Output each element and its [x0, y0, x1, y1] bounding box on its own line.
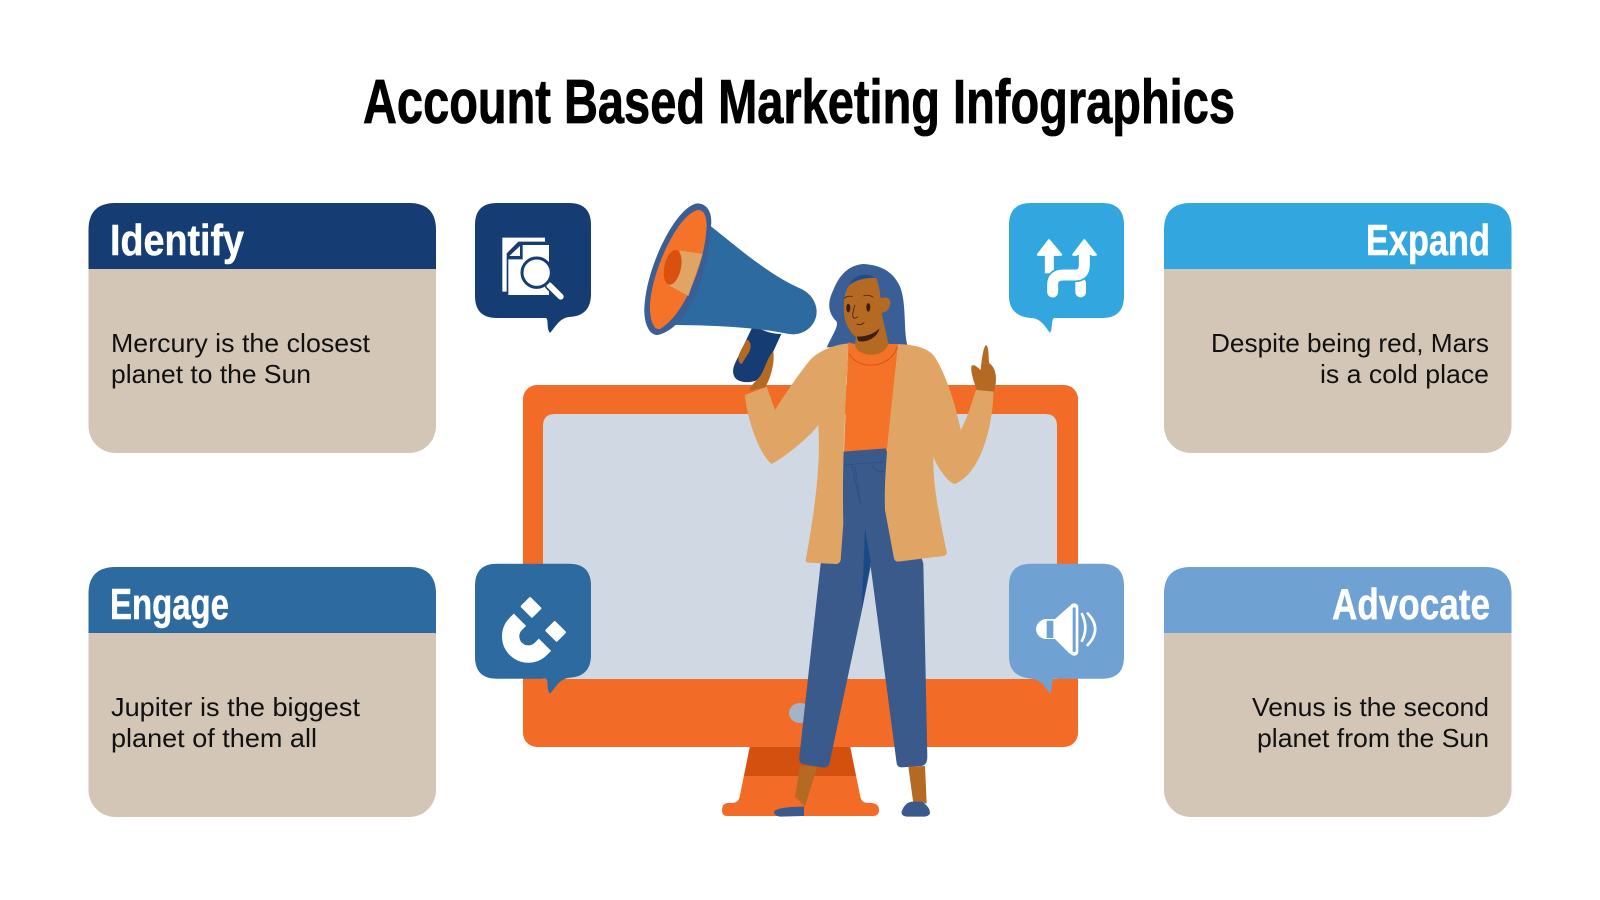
facial features [844, 295, 879, 341]
panel: identify [88, 203, 436, 453]
neck and face [844, 278, 897, 360]
description [1211, 328, 1489, 389]
icon bubble: speaker [1009, 564, 1124, 694]
card body [88, 203, 436, 453]
hand holding megaphone [738, 339, 774, 391]
megaphone [644, 203, 817, 382]
card header [1164, 203, 1512, 269]
icon bubble: document search [475, 203, 591, 333]
megaphone mouth [650, 210, 707, 329]
card header [88, 567, 436, 633]
megaphone handle [733, 325, 781, 382]
icon: arrows [1038, 240, 1096, 292]
icon: magnet [511, 597, 567, 654]
panel: advocate [1164, 567, 1512, 817]
description: planet to the Sun [111, 359, 311, 389]
hair highlight [849, 275, 875, 285]
description [111, 692, 361, 753]
jeans [799, 448, 927, 768]
person with megaphone [644, 203, 996, 817]
card header [1164, 567, 1512, 633]
description [1252, 692, 1489, 753]
icon bubble: merging arrows [1009, 203, 1124, 333]
heading: Advocate [1332, 580, 1490, 629]
monitor [523, 385, 1078, 816]
shirt [844, 342, 898, 453]
description: Despite being red, Mars [1211, 328, 1489, 358]
description: Jupiter is the biggest [111, 692, 361, 722]
panel: expand [1164, 203, 1512, 453]
heading: Engage [110, 580, 229, 629]
jacket [745, 343, 993, 564]
heading: Identify [110, 216, 244, 265]
monitor stand [722, 746, 879, 816]
card body [88, 567, 436, 817]
card body [1164, 567, 1512, 817]
title: Account Based Marketing Infographics [363, 68, 1235, 137]
home button [789, 703, 811, 723]
description: Mercury is the closest [111, 328, 371, 358]
megaphone rim [644, 203, 711, 335]
description [111, 328, 371, 389]
heading: Expand [1366, 216, 1490, 265]
description: planet of them all [111, 723, 317, 753]
description: is a cold place [1320, 359, 1489, 389]
description: planet from the Sun [1257, 723, 1489, 753]
megaphone cone [663, 218, 817, 334]
stand shadow [744, 746, 856, 776]
icon: document with magnifier [502, 238, 561, 297]
description: Venus is the second [1252, 692, 1489, 722]
card header [88, 203, 436, 269]
hair [827, 264, 907, 347]
icon: speaker [1036, 603, 1095, 656]
card body [1164, 203, 1512, 453]
raised hand [971, 345, 996, 392]
monitor screen [543, 414, 1057, 679]
ankles and shoes [774, 766, 930, 817]
icon bubble: magnet [475, 564, 591, 694]
panel: engage [88, 567, 436, 817]
monitor frame [523, 385, 1078, 747]
